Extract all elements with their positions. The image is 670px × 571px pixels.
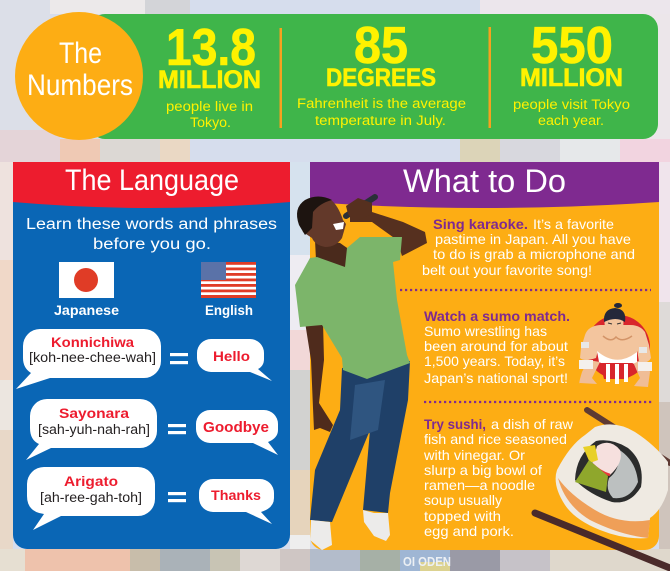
- heading: The Language: [13, 162, 290, 208]
- text: sing karaoke: to do is grab a microphone and: [433, 246, 635, 262]
- stat: 550 million: 550: [531, 17, 613, 75]
- neck: [315, 240, 350, 270]
- head: [300, 198, 346, 247]
- stat: 550 million: people visit Tokyo: [513, 97, 630, 112]
- icon: sumo wrestler: [579, 303, 652, 387]
- speech bubble: Arigato: [27, 467, 155, 530]
- background sign text: ODEN: OI ODEN: [403, 554, 451, 569]
- stat: 85 degrees: 85: [354, 17, 408, 75]
- phrase row: Konnichiwa = Hello: [16, 329, 272, 389]
- open mouth: [333, 222, 344, 230]
- phrase row: Sayonara = Goodbye: [26, 399, 278, 460]
- speech bubble: Konnichiwa: Konnichiwa: [51, 334, 134, 350]
- equals sign: [168, 424, 186, 434]
- speech bubble: Sayonara: [sah-yuh-nah-rah]: [38, 422, 150, 437]
- speech bubble: Sayonara: Sayonara: [59, 405, 129, 421]
- text: try sushi: slurp a big bowl of: [424, 462, 542, 478]
- stat: 550 million: [513, 17, 630, 128]
- speech bubble: Thanks: [199, 479, 274, 524]
- icon: American flag: [201, 262, 256, 298]
- stat: 13.8 million: Tokyo.: [190, 115, 231, 130]
- label: Japanese: Japanese: [54, 302, 119, 318]
- panel: the numbers: [15, 12, 658, 140]
- heading: What to Do: [310, 162, 659, 208]
- green t-shirt: [295, 237, 410, 379]
- intro text: [26, 216, 277, 253]
- heading: The Language: The Language: [65, 164, 239, 197]
- speech bubble: Goodbye: [196, 410, 278, 455]
- stat: 13.8 million: [158, 19, 261, 130]
- intro text: before you go.: [93, 236, 211, 253]
- orange panel background: [310, 162, 659, 550]
- raised arm: [350, 200, 427, 256]
- speech bubble: Arigato: [ah-ree-gah-toh]: [40, 490, 142, 505]
- hair: [297, 196, 332, 235]
- intro text: Learn these words and phrases: [26, 216, 277, 233]
- jeans: [310, 361, 410, 522]
- label: English: English: [205, 302, 253, 318]
- text: watch a sumo match: Sumo wrestling has: [424, 323, 547, 339]
- equals sign: [170, 353, 188, 364]
- divider lines: [280, 27, 491, 128]
- text: watch a sumo match: [424, 308, 570, 386]
- panel: what to do: [295, 162, 670, 568]
- stat: 13.8 million: 13.8: [166, 19, 256, 77]
- text: try sushi: topped with: [424, 508, 501, 524]
- illustration: teen singing into microphone: [295, 196, 427, 550]
- text: watch a sumo match: Japan’s national sport!: [424, 370, 568, 386]
- right shoe: [363, 510, 390, 541]
- text: watch a sumo match: been around for about: [424, 338, 568, 354]
- speech bubble: Thanks: Thanks: [211, 487, 261, 503]
- stat: 13.8 million: MILLION: [158, 66, 261, 94]
- heading badge: The Numbers: Numbers: [27, 69, 133, 102]
- speech bubble: Hello: [197, 339, 272, 381]
- panel: the language: [13, 162, 290, 549]
- text: sing karaoke: [422, 216, 635, 278]
- text: try sushi: fish and rice seasoned: [424, 431, 567, 447]
- blue panel background: [13, 162, 290, 549]
- text: try sushi: Try sushi,: [424, 416, 486, 432]
- stat: 85 degrees: DEGREES: [326, 64, 436, 92]
- text: try sushi: with vinegar. Or: [423, 447, 525, 463]
- text: sing karaoke: It’s a favorite: [533, 216, 614, 232]
- illustration: sushi roll held by chopsticks: [535, 410, 670, 568]
- stat: 13.8 million: people live in: [166, 99, 253, 114]
- text: sing karaoke: pastime in Japan. All you have: [435, 231, 631, 247]
- stat: 85 degrees: Fahrenheit is the average: [297, 96, 466, 111]
- speech bubble: Konnichiwa: [koh-nee-chee-wah]: [29, 350, 156, 365]
- text: watch a sumo match: Watch a sumo match.: [424, 308, 570, 324]
- stat: 550 million: MILLION: [520, 64, 623, 92]
- speech bubble: Konnichiwa: [16, 329, 161, 389]
- microphone: [346, 197, 375, 216]
- text: try sushi: ramen—a noodle: [424, 477, 535, 493]
- hand: [346, 198, 372, 222]
- stat: 85 degrees: temperature in July.: [315, 113, 446, 128]
- heading badge: The Numbers: [15, 12, 143, 140]
- text: sing karaoke: belt out your favorite song!: [422, 262, 592, 278]
- text: try sushi: [423, 416, 574, 539]
- equals sign: [168, 492, 186, 502]
- text: try sushi: a dish of raw: [491, 416, 574, 432]
- speech bubble: Sayonara: [26, 399, 157, 460]
- icon: Japanese flag: [59, 262, 114, 298]
- speech bubble: Hello: Hello: [213, 348, 250, 364]
- stat: 550 million: each year.: [538, 113, 604, 128]
- text: watch a sumo match: 1,500 years. Today, it’s: [424, 353, 565, 369]
- heading: What to Do: What to Do: [403, 163, 566, 199]
- stat: 85 degrees: [297, 17, 466, 128]
- speech bubble: Goodbye: Goodbye: [203, 419, 269, 436]
- text: try sushi: soup usually: [424, 492, 502, 508]
- text: sing karaoke: Sing karaoke.: [433, 216, 528, 232]
- text: try sushi: egg and pork.: [424, 523, 514, 539]
- heading badge: The Numbers: The: [59, 37, 102, 70]
- speech bubble: Arigato: Arigato: [64, 473, 118, 489]
- left shoe: [310, 520, 332, 550]
- phrase row: Arigato = Thanks: [27, 467, 274, 530]
- left arm: [305, 322, 333, 432]
- green banner: [90, 14, 658, 139]
